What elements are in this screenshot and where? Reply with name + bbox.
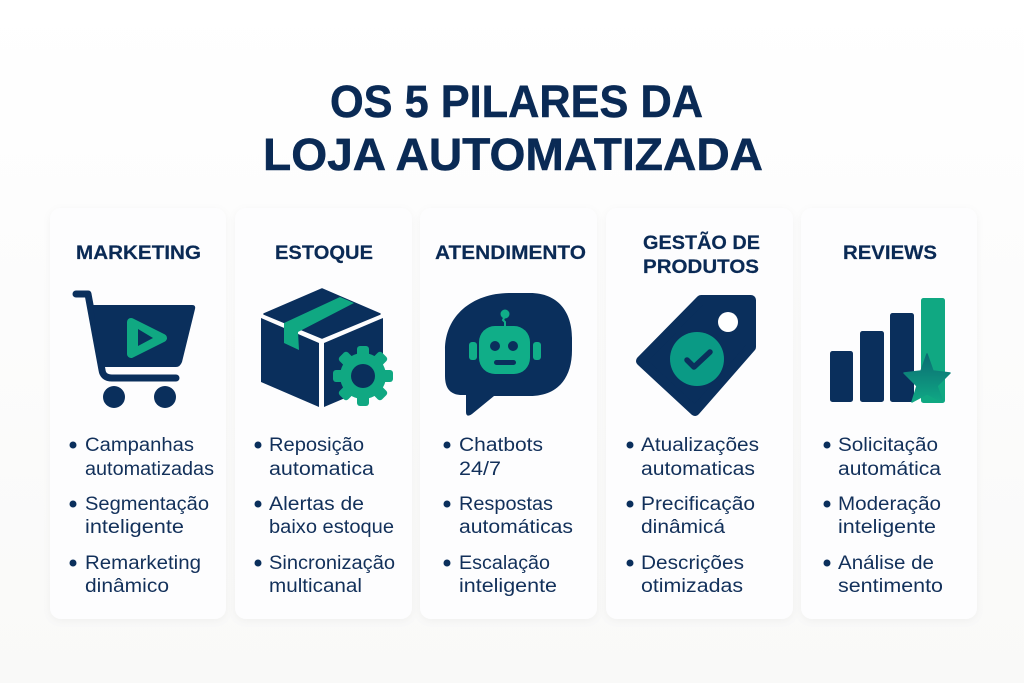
title: OS 5 PILARES DA <box>330 76 703 127</box>
list: gestao de produtos: Precificação <box>641 494 755 515</box>
list: atendimento: automáticas <box>459 517 573 538</box>
list: gestao de produtos: dinâmicá <box>641 517 725 538</box>
panel: marketing <box>50 208 226 619</box>
heading: marketing: MARKETING <box>76 242 201 264</box>
list: estoque: automatica <box>269 459 374 480</box>
list: estoque: multicanal <box>269 576 362 597</box>
list: gestao de produtos: Descrições <box>641 553 744 574</box>
icon: box with gear <box>261 289 393 407</box>
icon: price tag with check <box>641 300 751 411</box>
icon: shopping cart with play <box>76 294 195 408</box>
list: estoque: Alertas de <box>269 494 364 515</box>
heading: gestao de produtos: PRODUTOS <box>643 256 759 278</box>
list: marketing: Campanhas <box>85 435 194 456</box>
heading: atendimento: ATENDIMENTO <box>435 242 586 264</box>
list: reviews: sentimento <box>838 576 943 597</box>
list: reviews: Análise de <box>838 553 934 574</box>
list: reviews <box>824 435 943 597</box>
list: estoque: baixo estoque <box>269 517 394 538</box>
list: estoque: Sincronização <box>269 553 395 574</box>
list: gestao de produtos: Atualizações <box>641 435 759 456</box>
list: atendimento: 24/7 <box>459 459 501 480</box>
panel: atendimento <box>420 208 597 619</box>
list: reviews: inteligente <box>838 517 936 538</box>
list: atendimento: Chatbots <box>459 435 543 456</box>
title <box>263 76 763 180</box>
list: reviews: Solicitação <box>838 435 938 456</box>
list: reviews: automática <box>838 459 941 480</box>
heading: reviews: REVIEWS <box>843 242 937 264</box>
list: marketing: automatizadas <box>85 459 214 480</box>
list: estoque <box>254 435 395 597</box>
panel: estoque <box>235 208 412 619</box>
icon: chat bubble with robot <box>445 293 572 416</box>
list: atendimento: inteligente <box>459 576 557 597</box>
panel: reviews <box>801 208 977 619</box>
list: marketing <box>70 435 214 597</box>
list: marketing: dinâmico <box>85 576 169 597</box>
icon: bar chart with star <box>830 298 950 403</box>
list: gestao de produtos: otimizadas <box>641 576 743 597</box>
list: gestao de produtos <box>626 435 759 597</box>
list: atendimento: Respostas <box>459 494 553 515</box>
list: marketing: inteligente <box>85 517 184 538</box>
list: atendimento: Escalação <box>459 553 550 574</box>
title: LOJA AUTOMATIZADA <box>263 129 763 180</box>
list: atendimento <box>444 435 573 597</box>
panel: gestao de produtos <box>606 208 793 619</box>
heading: gestao de produtos: GESTÃO DE <box>643 231 760 254</box>
list: marketing: Segmentação <box>85 494 209 515</box>
heading: estoque: ESTOQUE <box>275 242 373 264</box>
list: gestao de produtos: automaticas <box>641 459 755 480</box>
list: reviews: Moderação <box>838 494 941 515</box>
list: marketing: Remarketing <box>85 553 201 574</box>
list: estoque: Reposição <box>269 435 364 456</box>
heading: gestao de produtos <box>643 231 760 278</box>
